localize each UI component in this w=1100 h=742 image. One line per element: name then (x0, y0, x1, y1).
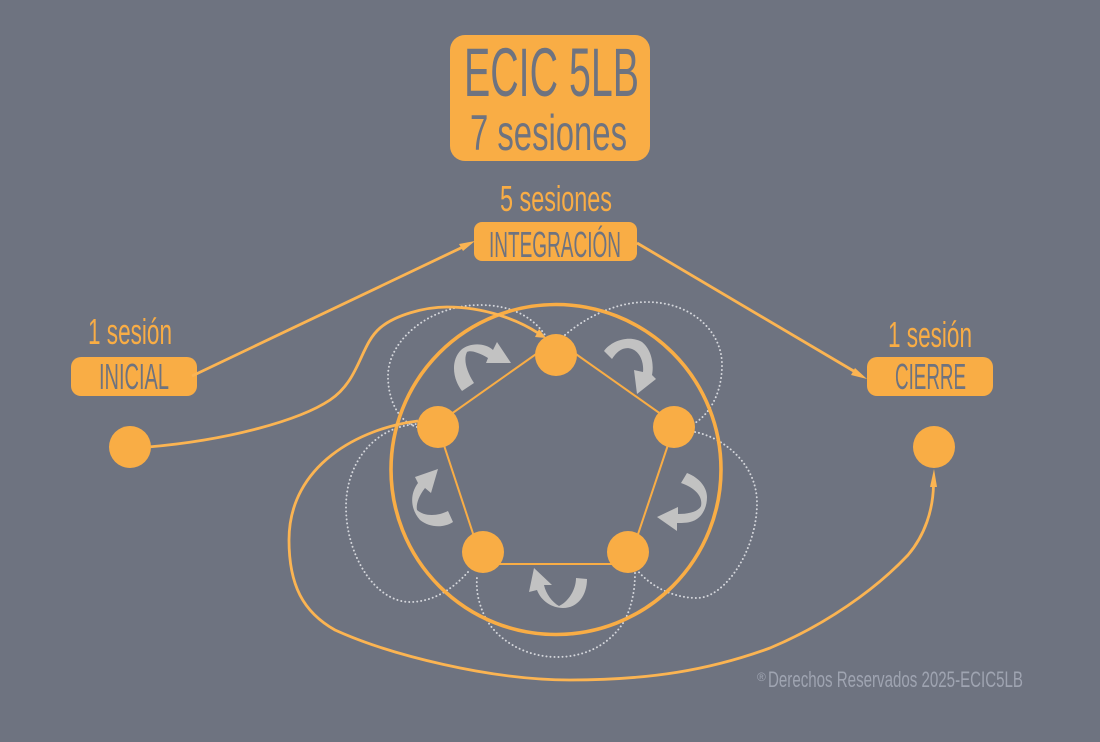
pentagon connecting sessions (437, 340, 675, 564)
initial phase label (71, 311, 197, 397)
title box: ECIC 5LB (464, 34, 639, 111)
closing phase label: 1 sesión (888, 314, 972, 355)
title box (450, 34, 650, 161)
integration phase label: 5 sesiones (500, 178, 612, 219)
closing dot (913, 426, 955, 468)
closing phase label (867, 314, 993, 397)
initial dot (109, 426, 151, 468)
curve: last session to closing dot (289, 421, 937, 680)
dotted session loops (346, 302, 757, 657)
initial phase label: 1 sesión (88, 311, 172, 352)
gray rotation arrow: left (412, 469, 453, 526)
gray rotation arrow: bottom (529, 568, 587, 608)
gray rotation arrow: top right (604, 339, 656, 394)
arrow: initial to integration (192, 241, 475, 376)
arrow: integration to closing (637, 243, 867, 379)
integration phase label: INTEGRACIÓN (489, 224, 621, 265)
integration phase label (474, 178, 637, 265)
closing phase label: CIERRE (895, 356, 966, 397)
curve: initial dot to first session (148, 307, 546, 447)
initial phase label: INICIAL (99, 356, 169, 397)
gray rotation arrow: right (657, 473, 707, 531)
large orange circle (391, 304, 721, 634)
copyright notice: ® (757, 670, 766, 684)
title box: 7 sesiones (470, 105, 627, 161)
session nodes (417, 334, 695, 573)
gray rotation arrow: top left (454, 342, 511, 391)
